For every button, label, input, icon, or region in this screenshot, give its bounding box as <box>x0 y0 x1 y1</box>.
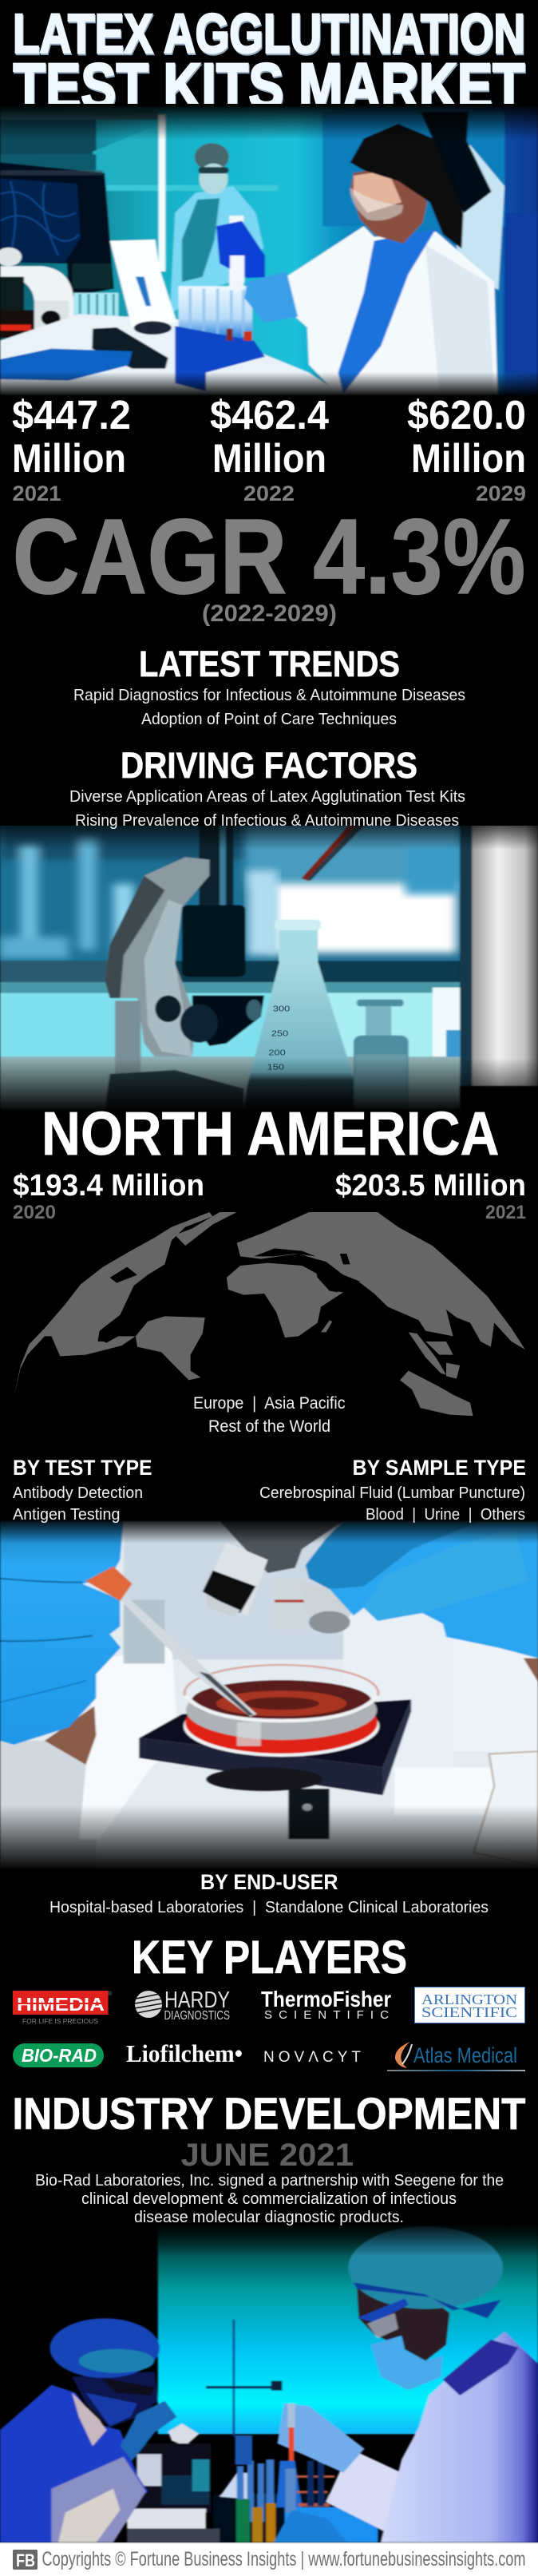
driving factors list: Rising Prevalence of Infectious & Autoimmune Diseases <box>75 812 459 830</box>
left scientist <box>0 2385 148 2542</box>
CAGR period: (2022-2029) <box>202 600 337 627</box>
photo: microscope and glass flasks: 200 <box>268 1049 286 1057</box>
logo: Bio-Rad: BIO-RAD <box>22 2045 97 2066</box>
logo: Thermo Fisher Scientific: ThermoFisher <box>261 1987 391 2011</box>
photo: microscope and glass flasks: 150 <box>267 1064 284 1072</box>
heading: driving factors: DRIVING FACTORS <box>121 745 417 786</box>
stat: 2022 market size: 2022 <box>243 482 295 505</box>
petri dish <box>184 1695 379 1757</box>
logo: Hardy Diagnostics: HARDY <box>164 1987 230 2013</box>
segment: by sample type: Blood | Urine | Others <box>366 1506 525 1524</box>
stat: 2029 market size: Million <box>411 436 526 481</box>
right scientist <box>326 2449 402 2531</box>
stat: 2022 market size: $462.4 <box>210 392 330 438</box>
flask <box>243 961 357 1110</box>
segment: by test type: BY TEST TYPE <box>13 1456 152 1480</box>
development date: JUNE 2021 <box>180 2138 354 2173</box>
logo: Atlas Medical <box>387 2042 525 2071</box>
tube rack in the background <box>73 293 118 317</box>
photo: microscope and glass flasks: 300 <box>273 1005 290 1013</box>
stat: 2022 market size <box>210 392 330 505</box>
driving factors list: Diverse Application Areas of Latex Agglutination Test Kits <box>69 788 465 806</box>
stat: 2021 market size: Million <box>12 436 126 481</box>
stage <box>139 1699 411 1767</box>
latest trends list <box>73 687 465 728</box>
logo: Hardy Diagnostics <box>135 1987 230 2023</box>
glove and pipette <box>229 216 243 290</box>
other regions list: Europe | Asia Pacific <box>193 1394 345 1413</box>
logo: Liofilchem: Liofilchem• <box>126 2039 243 2067</box>
latest trends list: Adoption of Point of Care Techniques <box>141 711 397 728</box>
segment: by sample type: Cerebrospinal Fluid (Lumbar Puncture) <box>259 1484 525 1502</box>
logo: Hardy Diagnostics: DIAGNOSTICS <box>164 2009 230 2023</box>
segment: by test type: Antibody Detection <box>13 1484 143 1502</box>
white device <box>110 240 176 329</box>
photo: microscope and glass flasks <box>0 814 538 1112</box>
stat: 2021 market size <box>12 392 131 505</box>
development description: disease molecular diagnostic products. <box>134 2209 404 2226</box>
stat: North America 2021: 2021 <box>485 1202 526 1223</box>
logo: Arlington Scientific: ARLINGTON <box>421 1991 517 2007</box>
gloved hand with tube <box>277 2404 365 2473</box>
driving factors list <box>69 788 465 830</box>
bench <box>0 314 343 395</box>
beaker <box>473 1751 538 1866</box>
logo: HiMedia: HIMEDIA <box>17 1994 105 2015</box>
stat: North America 2021 <box>335 1169 526 1223</box>
right glove <box>306 1521 538 1659</box>
pipette <box>120 1595 257 1717</box>
development description: Bio-Rad Laboratories, Inc. signed a partnership with Seegene for the <box>35 2172 504 2190</box>
stat: North America 2020: 2020 <box>13 1202 56 1223</box>
title <box>13 2 526 125</box>
stat: 2029 market size <box>407 392 526 505</box>
left microscope <box>168 2423 199 2446</box>
logo: HiMedia: ® <box>108 1991 113 1997</box>
logo: Arlington Scientific <box>415 1987 525 2023</box>
logo: Arlington Scientific: SCIENTIFIC <box>421 2004 517 2020</box>
logo: HiMedia: FOR LIFE IS PRECIOUS <box>22 2017 98 2025</box>
segment: by sample type: BY SAMPLE TYPE <box>353 1456 526 1480</box>
segment: by test type <box>13 1456 152 1524</box>
world map globe <box>14 1212 525 1416</box>
stat: North America 2020: $193.4 Million <box>13 1169 204 1203</box>
stat: North America 2021: $203.5 Million <box>335 1169 526 1203</box>
latest trends list: Rapid Diagnostics for Infectious & Autoimmune Diseases <box>73 687 465 704</box>
logo: HiMedia <box>13 1991 113 2025</box>
photo: two researchers with test tube and microscope <box>0 2220 538 2542</box>
logo: Thermo Fisher Scientific <box>261 1987 391 2022</box>
stat: 2022 market size: Million <box>212 436 326 481</box>
photo: gloved hands pipetting into a petri dish <box>0 1517 538 1871</box>
objectives <box>220 1521 343 1573</box>
microscope <box>0 266 73 343</box>
stat: North America 2020 <box>13 1169 204 1223</box>
photo: scientists pipetting in a laboratory <box>0 104 538 397</box>
stat: 2021 market size: $447.2 <box>12 392 131 438</box>
other regions list: Rest of the World <box>208 1417 330 1436</box>
segment: by end-user: Hospital-based Laboratories | Standalone Clinical Laboratories <box>49 1899 489 1916</box>
icon: Fortune Business Insights logo: FB <box>16 2550 35 2570</box>
bottle <box>357 1000 403 1006</box>
development description <box>35 2172 504 2226</box>
development description: clinical development & commercialization of infectious <box>81 2190 457 2208</box>
main scientist <box>441 145 504 290</box>
heading: latest trends: LATEST TRENDS <box>139 644 400 684</box>
keyboard and mouse <box>92 327 168 369</box>
equipment <box>213 2494 385 2542</box>
test tubes <box>179 286 252 339</box>
stat: 2029 market size: 2029 <box>476 482 526 505</box>
dropper <box>302 820 370 881</box>
other regions list <box>193 1394 345 1436</box>
monitor <box>0 162 114 297</box>
logo: Atlas Medical: Atlas Medical <box>413 2043 517 2067</box>
footer bar <box>0 2542 538 2576</box>
segment: by test type: Antigen Testing <box>13 1506 120 1524</box>
segment: by sample type <box>259 1456 526 1524</box>
logo: Thermo Fisher Scientific: SCIENTIFIC <box>264 2008 389 2022</box>
microscope <box>199 820 233 916</box>
photo: microscope and glass flasks: 250 <box>271 1030 288 1038</box>
older scientist <box>170 186 263 314</box>
segment: by end-user: BY END-USER <box>200 1870 338 1894</box>
skin <box>45 1706 96 1765</box>
logo: Novacyt: NOVΛCYT <box>263 2049 361 2066</box>
left glove <box>0 1521 124 1745</box>
heading: key players: KEY PLAYERS <box>132 1932 407 1984</box>
stat: 2029 market size: $620.0 <box>407 392 526 438</box>
segment: by end-user <box>49 1870 489 1916</box>
stat: 2021 market size: 2021 <box>13 482 61 505</box>
